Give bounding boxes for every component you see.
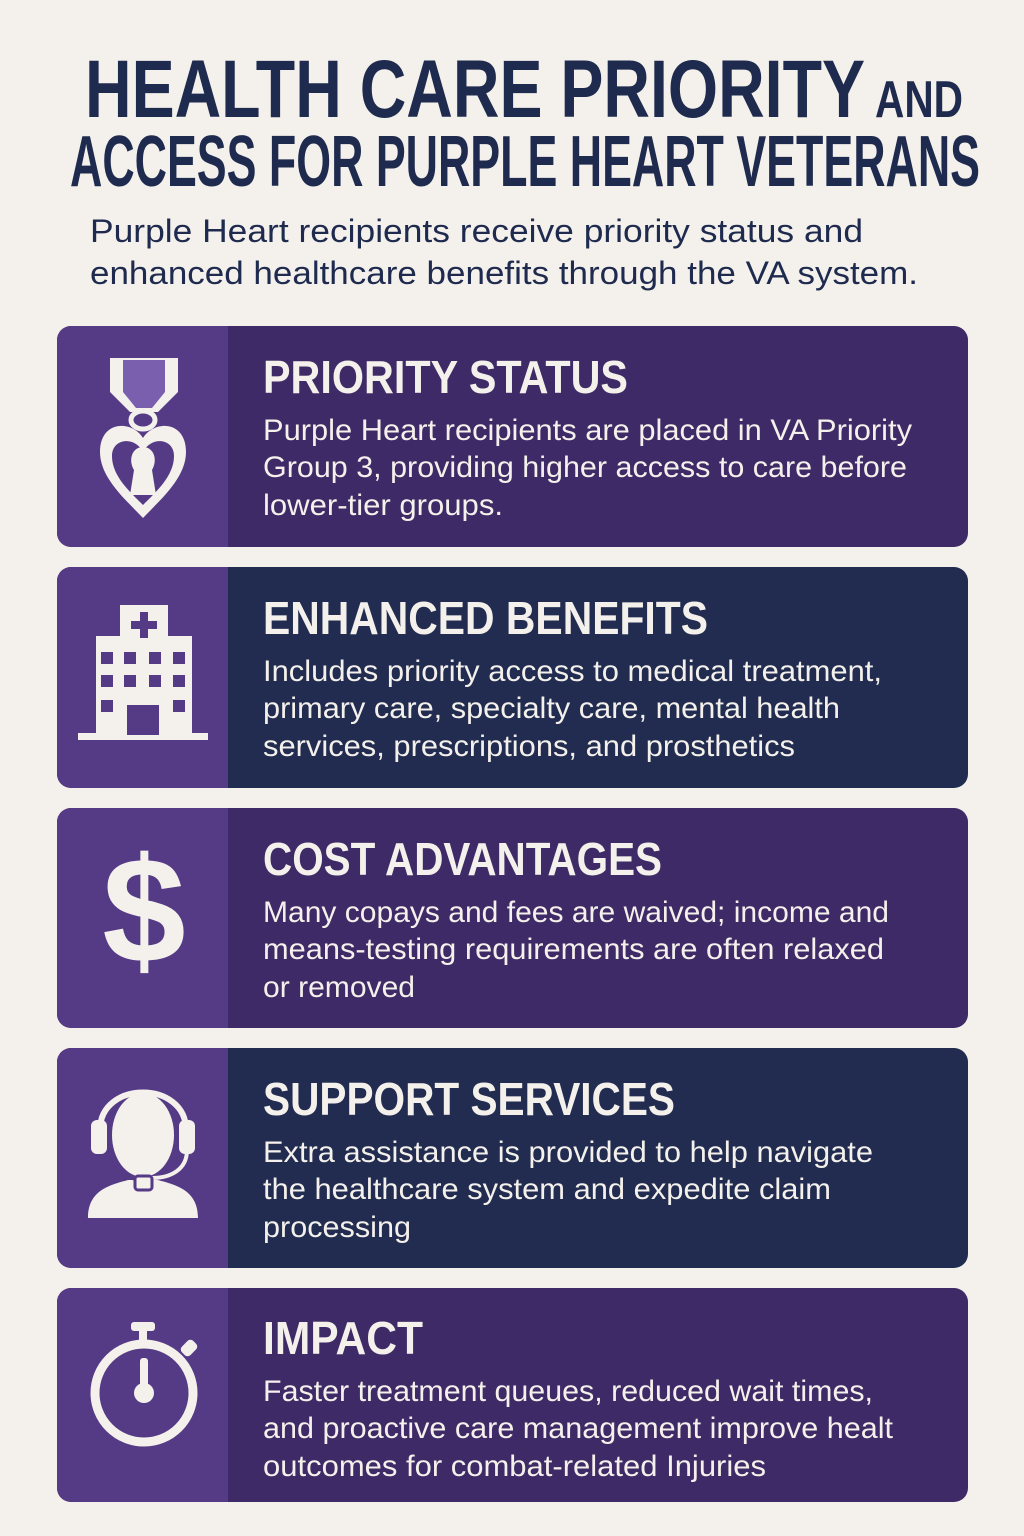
panel: cost advantages xyxy=(57,808,968,1028)
icon: headset person xyxy=(88,1088,198,1218)
heading: impact: IMPACT xyxy=(263,1312,423,1364)
text: support services body: the healthcare system and expedite claim xyxy=(263,1173,831,1206)
text: enhanced benefits body xyxy=(263,655,882,763)
text: enhanced benefits body: services, prescriptions, and prosthetics xyxy=(263,730,795,763)
panel: impact xyxy=(57,1288,968,1502)
heading: priority status: PRIORITY STATUS xyxy=(263,351,628,403)
panel: support services xyxy=(57,1048,968,1268)
text: support services body: processing xyxy=(263,1211,411,1244)
subtitle: Purple Heart recipients receive priority status and xyxy=(90,213,863,249)
icon: dollar sign: $ xyxy=(102,826,186,994)
text: cost advantages body: means-testing requirements are often relaxed xyxy=(263,933,884,966)
text: support services body xyxy=(263,1136,873,1244)
text: enhanced benefits body: Includes priority access to medical treatment, xyxy=(263,655,882,688)
text: priority status body: Group 3, providing higher access to care before xyxy=(263,451,907,484)
panel: enhanced benefits xyxy=(57,567,968,788)
icon: stopwatch xyxy=(95,1322,199,1442)
text: cost advantages body: Many copays and fees are waived; income and xyxy=(263,896,889,929)
title xyxy=(70,44,980,202)
text: cost advantages body xyxy=(263,896,889,1004)
text: impact body xyxy=(263,1375,894,1483)
heading: support services: SUPPORT SERVICES xyxy=(263,1073,675,1125)
heading: cost advantages: COST ADVANTAGES xyxy=(263,833,662,885)
text: priority status body: Purple Heart recipients are placed in VA Priority xyxy=(263,414,912,447)
text: enhanced benefits body: primary care, specialty care, mental health xyxy=(263,692,840,725)
subtitle xyxy=(90,213,918,291)
text: priority status body: lower-tier groups. xyxy=(263,489,503,522)
icon: hospital xyxy=(78,605,208,740)
panel: priority status xyxy=(57,326,968,547)
text: impact body: outcomes for combat-related Injuries xyxy=(263,1450,766,1483)
title: AND xyxy=(875,71,963,129)
icon: purple heart medal xyxy=(100,358,186,518)
text: cost advantages body: or removed xyxy=(263,971,415,1004)
subtitle: enhanced healthcare benefits through the VA system. xyxy=(90,255,918,291)
text: support services body: Extra assistance is provided to help navigate xyxy=(263,1136,873,1169)
heading: enhanced benefits: ENHANCED BENEFITS xyxy=(263,592,708,644)
text: impact body: Faster treatment queues, reduced wait times, xyxy=(263,1375,873,1408)
text: impact body: and proactive care management improve healt xyxy=(263,1412,894,1445)
text: priority status body xyxy=(263,414,912,522)
